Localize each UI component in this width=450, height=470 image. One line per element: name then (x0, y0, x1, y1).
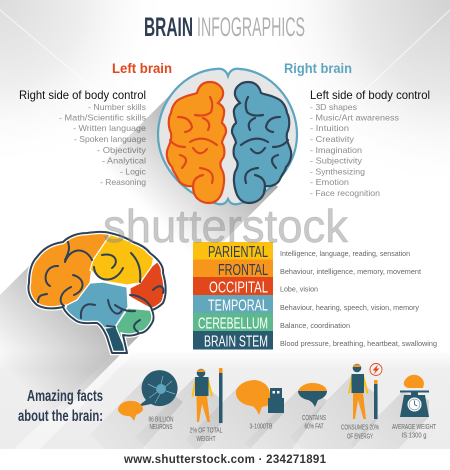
caption (148, 414, 174, 431)
caption: WEIGHT (196, 434, 216, 443)
text block: right side of body control: - Objectivity (97, 145, 147, 155)
heading: right brain: Right brain (284, 61, 352, 76)
text block: right side of body control: - Analytical (102, 156, 146, 166)
text block: right side of body control: - Reasoning (100, 177, 146, 187)
title (144, 12, 305, 42)
fact: energy (341, 364, 382, 440)
icon: person (192, 369, 213, 422)
row: cerebellum (193, 313, 350, 332)
row: cerebellum: CEREBELLUM (198, 316, 268, 332)
row: pariental (193, 242, 410, 261)
region: frontal (30, 234, 109, 306)
heading: left brain: Left brain (112, 61, 172, 76)
caption: 3-1000TB (250, 422, 272, 430)
caption: 60% FAT (304, 422, 324, 430)
heading: amazing facts: Amazing facts (27, 388, 103, 405)
text block: left side of body control: - Creativity (310, 134, 355, 144)
caption: OF ENERGY (347, 432, 373, 440)
text block: right side of body control: - Written language (73, 123, 146, 133)
right hemisphere (232, 82, 291, 203)
title: BRAIN (144, 12, 193, 42)
text block: left side of body control: - Imagination (310, 145, 362, 155)
text block: left side of body control: - Music/Art awareness (310, 112, 399, 122)
row: temporal: TEMPORAL (208, 298, 268, 314)
text block: right side of body control: - Logic (120, 166, 147, 176)
region: parietal (89, 235, 153, 284)
row: pariental: PARIENTAL (208, 244, 268, 261)
icon: usb stick (268, 388, 284, 413)
region: brain stem (104, 327, 124, 351)
caption: CONSUMES 20% (341, 422, 379, 432)
fact: average weight (392, 375, 436, 440)
row: brain stem (193, 331, 437, 350)
text block: right side of body control: Right side of body control (19, 88, 146, 102)
text block: left side of body control: - Synthesizing (310, 166, 365, 176)
text block: right side of body control (19, 88, 147, 187)
icon: neuron bubble (137, 370, 178, 407)
left hemisphere (167, 82, 226, 203)
row: cerebellum: Balance, coordination (280, 321, 350, 330)
watermark: shutterstock (103, 200, 349, 252)
side brain illustration (0, 230, 167, 410)
brain line art (28, 232, 166, 353)
icon: brain (236, 380, 270, 415)
fact: fat (298, 383, 327, 430)
head outline (158, 69, 297, 204)
row: temporal: Behaviour, hearing, speech, vision, memory (280, 303, 419, 312)
caption: 2% OF TOTAL (190, 426, 222, 434)
icon: small brain (118, 401, 143, 421)
icon: lightning badge (370, 364, 382, 376)
icon: brain on scale (404, 375, 424, 388)
caption: IS 1300 g (402, 430, 426, 440)
row: frontal: FRONTAL (218, 262, 268, 279)
row: brain stem: Blood pressure, breathing, heartbeat, swallowing (280, 339, 437, 348)
fact: neurons (118, 370, 178, 431)
icon: energy bar (374, 380, 378, 419)
row: occipital (193, 277, 318, 296)
row: occipital: OCCIPITAL (209, 280, 268, 296)
caption (341, 422, 379, 440)
text block: left side of body control: - 3D shapes (310, 102, 357, 112)
row: frontal (193, 260, 421, 279)
text block: left side of body control: - Face recognition (310, 188, 380, 198)
text block: left side of body control (310, 88, 430, 198)
row: temporal (193, 295, 419, 314)
shadow: side brain (0, 245, 140, 420)
caption: 86 BILLION (148, 414, 174, 424)
text block: left side of body control: Left side of body control (310, 88, 430, 102)
heading: amazing facts: about the brain: (18, 408, 103, 425)
caption: CONTAINS (302, 413, 326, 422)
fact: storage (236, 380, 284, 430)
text block: left side of body control: - Emotion (310, 177, 349, 187)
icon shadows (100, 376, 429, 449)
footer: url and id: www.shutterstock.com · 234271891 (123, 454, 327, 466)
heading: amazing facts (18, 388, 103, 425)
top brain illustration (100, 69, 297, 265)
text block: right side of body control: - Spoken language (74, 134, 146, 144)
brain outline (28, 232, 166, 353)
region: temporal (66, 282, 128, 328)
region: cerebellum (116, 308, 152, 340)
text block: right side of body control: - Math/Scientific skills (59, 112, 146, 122)
row: brain stem: BRAIN STEM (204, 334, 268, 350)
caption (392, 422, 436, 440)
icon: person (348, 364, 368, 419)
icon: weight bar (219, 368, 222, 423)
shadow: top brain (100, 87, 278, 265)
fact: total weight (190, 368, 222, 443)
table: brain regions (193, 242, 437, 350)
text block: right side of body control: - Number skills (88, 102, 146, 112)
caption (190, 426, 222, 443)
caption: NEURONS (150, 422, 172, 431)
region: occipital (130, 262, 164, 308)
row: pariental: Intelligence, language, reading, sensation (280, 249, 410, 258)
row: occipital: Lobe, vision (280, 284, 318, 294)
caption (302, 413, 326, 430)
text block: left side of body control: - Subjectivity (310, 156, 363, 166)
text block: left side of body control: - Intuition (310, 123, 349, 133)
row: frontal: Behaviour, intelligence, memory, movement (280, 267, 421, 276)
icon: scale (400, 390, 429, 417)
icon: half filled brain (298, 383, 327, 407)
title: INFOGRAPHICS (197, 12, 305, 42)
brain colour regions (30, 234, 164, 351)
